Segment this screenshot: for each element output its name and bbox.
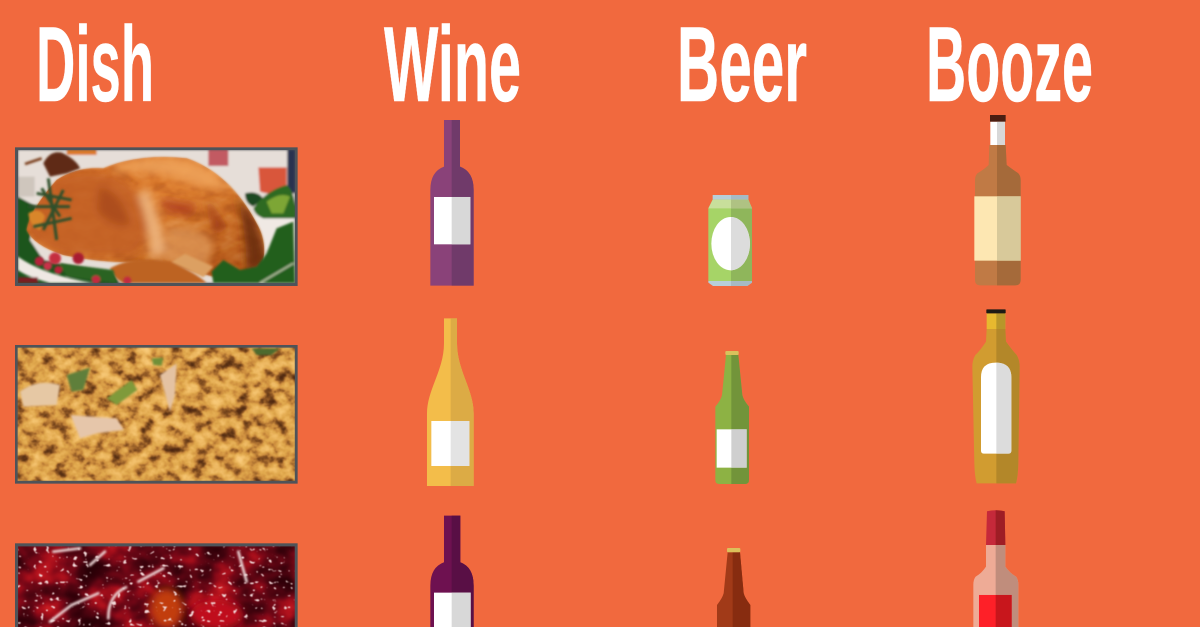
photo: cranberry sauce xyxy=(15,543,298,627)
heading: Wine: Wine xyxy=(384,4,521,124)
beer bottle: brown xyxy=(717,548,750,627)
liquor bottle: rose xyxy=(973,510,1018,627)
rosemary sprig xyxy=(28,178,72,240)
wine bottle: dark plum xyxy=(430,516,474,627)
heading: Dish: Dish xyxy=(36,4,154,124)
wine bottle: purple xyxy=(430,120,474,286)
liquor bottle: gold xyxy=(972,309,1020,483)
photo: stuffing xyxy=(15,345,298,484)
beer can: green xyxy=(708,195,752,286)
photo: roast turkey xyxy=(15,147,298,286)
heading: Beer: Beer xyxy=(677,4,807,124)
beer bottle: green xyxy=(715,351,749,484)
liquor bottle: amber xyxy=(974,115,1021,285)
wine bottle: yellow xyxy=(427,318,474,486)
